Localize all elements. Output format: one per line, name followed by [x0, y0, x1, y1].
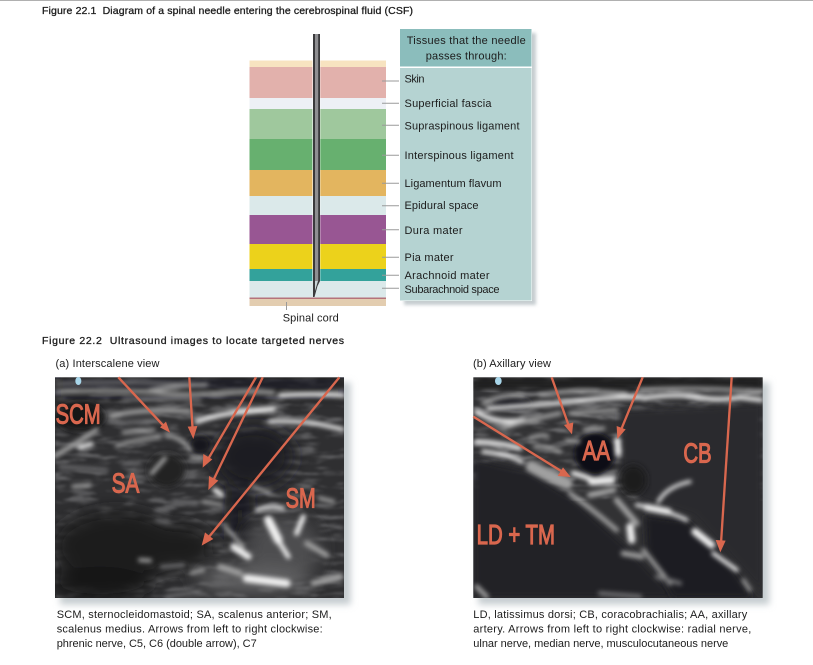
blue orientation marker	[495, 377, 502, 385]
caption: axillary view: ulnar nerve, median nerve, musculocutaneous nerve	[473, 638, 728, 650]
tissue labels: Supraspinous ligament	[404, 120, 520, 132]
tissue labels: Pia mater	[404, 252, 454, 264]
diagram: needle through tissue layers	[250, 34, 386, 324]
tissue labels: Interspinous ligament	[404, 150, 514, 162]
caption: axillary view	[473, 609, 751, 650]
panel heading: passes through:	[426, 50, 507, 62]
tissue labels: Subarachnoid space	[404, 284, 500, 296]
muscle labels: CB	[683, 438, 712, 469]
tissue labels: Ligamentum flavum	[404, 178, 502, 190]
scan texture	[50, 377, 344, 600]
nerve arrows	[118, 377, 339, 546]
tissue labels: Epidural space	[404, 200, 478, 212]
ultrasound image: axillary view	[473, 377, 769, 605]
caption: axillary view: LD, latissimus dorsi; CB, coracobrachialis; AA, axillary	[473, 609, 748, 621]
caption: interscalene view: SCM, sternocleidomastoid; SA, scalenus anterior; SM,	[57, 609, 332, 621]
muscle labels: AA	[583, 435, 610, 466]
muscle labels	[477, 435, 712, 550]
scan texture	[473, 377, 763, 598]
tissue labels	[404, 74, 520, 296]
blue orientation marker	[75, 377, 81, 385]
spinal cord label	[283, 302, 339, 324]
caption: interscalene view	[57, 609, 332, 650]
spinal needle	[312, 34, 320, 297]
tissue labels: Dura mater	[404, 225, 463, 237]
muscle labels: SM	[286, 482, 316, 513]
panel heading: Tissues that the needle	[407, 35, 526, 47]
caption: interscalene view: phrenic nerve, C5, C6 (double arrow), C7	[57, 638, 257, 650]
panel heading	[407, 35, 526, 62]
figure 22.1 title: Figure 22.1 Diagram of a spinal needle entering the cerebrospinal fluid (CSF)	[42, 5, 413, 17]
nerve arrows	[473, 377, 732, 552]
tissue labels: Skin	[404, 74, 424, 86]
caption: axillary view: artery. Arrows from left to right clockwise: radial nerve,	[473, 624, 751, 636]
muscle labels: LD + TM	[477, 519, 555, 550]
tissue labels: Superficial fascia	[404, 98, 492, 110]
muscle labels: SCM	[56, 398, 101, 429]
tissue labels: Arachnoid mater	[404, 270, 490, 282]
ultrasound image: interscalene view	[50, 377, 351, 605]
subheading: axillary view: (b) Axillary view	[473, 358, 551, 370]
caption: interscalene view: scalenus medius. Arrows from left to right clockwise:	[57, 624, 323, 636]
spinal cord label: Spinal cord	[283, 312, 339, 324]
figure 22.2 title: Figure 22.2 Ultrasound images to locate targeted nerves	[42, 335, 344, 347]
leader lines	[382, 81, 399, 288]
muscle labels	[56, 398, 316, 513]
panel: tissues the needle passes through	[400, 29, 536, 305]
muscle labels: SA	[112, 468, 140, 499]
tissue layer bands	[250, 60, 386, 306]
subheading: interscalene view: (a) Interscalene view	[56, 358, 160, 370]
